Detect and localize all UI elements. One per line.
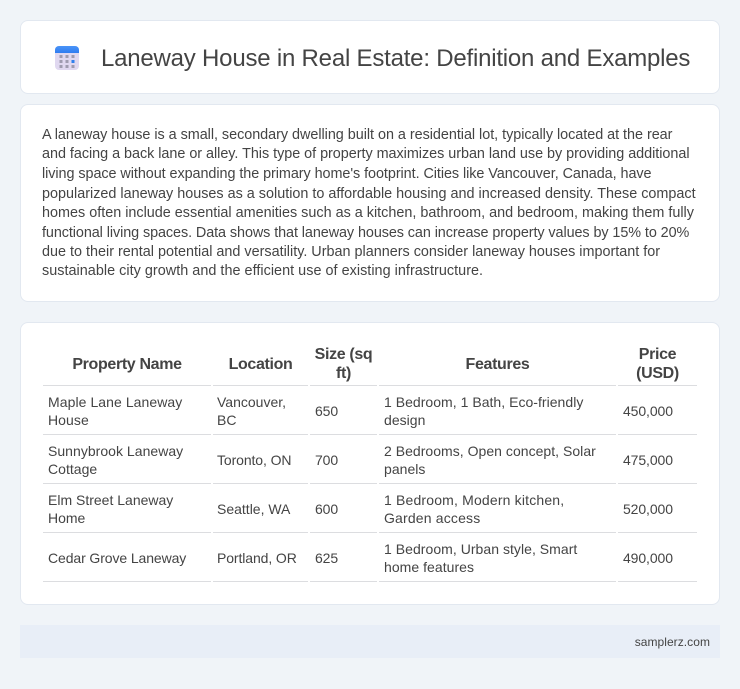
panel: property table	[20, 322, 720, 605]
row: Cedar Grove Laneway: 490,000	[623, 550, 673, 566]
row: Maple Lane Laneway House	[43, 385, 697, 428]
row: Maple Lane Laneway House: 1 Bedroom, 1 Bath, Eco-friendly	[384, 394, 583, 410]
title: Laneway House in Real Estate: Definition and Examples	[101, 45, 690, 72]
table header	[72, 346, 679, 382]
row: Elm Street Laneway Home: Home	[48, 510, 85, 526]
row: Sunnybrook Laneway Cottage: 2 Bedrooms, Open concept, Solar	[384, 443, 596, 459]
description paragraph	[42, 127, 696, 279]
description paragraph: functional living spaces. Data shows that laneway houses can increase property values by 15% to 20%	[42, 225, 689, 241]
row: Sunnybrook Laneway Cottage: Sunnybrook Laneway	[48, 443, 183, 459]
row: Sunnybrook Laneway Cottage: Toronto, ON	[217, 452, 291, 468]
description paragraph: living space without expanding the primary home's footprint. Cities like Vancouver, Canada, have	[42, 166, 651, 182]
description paragraph: sustainable city growth and the efficient use of existing infrastructure.	[42, 263, 483, 279]
row: Maple Lane Laneway House: 450,000	[623, 403, 673, 419]
row: Elm Street Laneway Home: 600	[315, 501, 338, 517]
row: Maple Lane Laneway House: design	[384, 412, 425, 428]
row: Maple Lane Laneway House: 650	[315, 403, 338, 419]
icon: calendar	[55, 46, 79, 70]
row: Elm Street Laneway Home: 520,000	[623, 501, 673, 517]
row: Sunnybrook Laneway Cottage: 475,000	[623, 452, 673, 468]
row: Cedar Grove Laneway: 625	[315, 550, 338, 566]
row: Elm Street Laneway Home: Elm Street Laneway	[48, 492, 173, 508]
description paragraph: A laneway house is a small, secondary dwelling built on a residential lot, typically located at the rear	[42, 127, 672, 143]
row: Elm Street Laneway Home: Seattle, WA	[217, 501, 290, 517]
row: Maple Lane Laneway House: Vancouver,	[217, 394, 286, 410]
description paragraph: homes often include essential amenities such as a kitchen, bathroom, and bedroom, making them fully	[42, 205, 694, 221]
table header: Location	[229, 356, 292, 373]
footer text: samplerz.com	[635, 635, 710, 649]
row: Sunnybrook Laneway Cottage: panels	[384, 461, 425, 477]
table header: ft)	[336, 365, 351, 382]
row: Elm Street Laneway Home	[43, 483, 697, 526]
row: Elm Street Laneway Home: Garden access	[384, 510, 480, 526]
row: Cedar Grove Laneway: Cedar Grove Laneway	[48, 550, 186, 566]
footer bar	[20, 625, 720, 658]
row: Sunnybrook Laneway Cottage: 700	[315, 452, 338, 468]
row: Maple Lane Laneway House: House	[48, 412, 89, 428]
row: Cedar Grove Laneway: Portland, OR	[217, 550, 297, 566]
header panel	[20, 20, 720, 94]
table header: Property Name	[72, 356, 182, 373]
row: Sunnybrook Laneway Cottage: Cottage	[48, 461, 97, 477]
row: Cedar Grove Laneway	[43, 532, 697, 582]
row: Cedar Grove Laneway: 1 Bedroom, Urban style, Smart	[384, 541, 577, 557]
table header: Size (sq	[315, 346, 372, 363]
panel: description	[20, 104, 720, 302]
row: Sunnybrook Laneway Cottage	[43, 434, 697, 477]
description paragraph: due to their rental potential and versatility. Urban planners consider laneway houses important for	[42, 244, 660, 260]
table header: (USD)	[636, 365, 679, 382]
row: Maple Lane Laneway House: BC	[217, 412, 236, 428]
row: Cedar Grove Laneway: home features	[384, 559, 474, 575]
table header: Features	[466, 356, 529, 373]
description paragraph: popularized laneway houses as a solution to affordable housing and increased density. These compact	[42, 186, 696, 202]
table header: Price	[639, 346, 676, 363]
row: Maple Lane Laneway House: Maple Lane Laneway	[48, 394, 182, 410]
description paragraph: and facing a back lane or alley. This type of property maximizes urban land use by providing additional	[42, 146, 690, 162]
row: Elm Street Laneway Home: 1 Bedroom, Modern kitchen,	[384, 492, 564, 508]
